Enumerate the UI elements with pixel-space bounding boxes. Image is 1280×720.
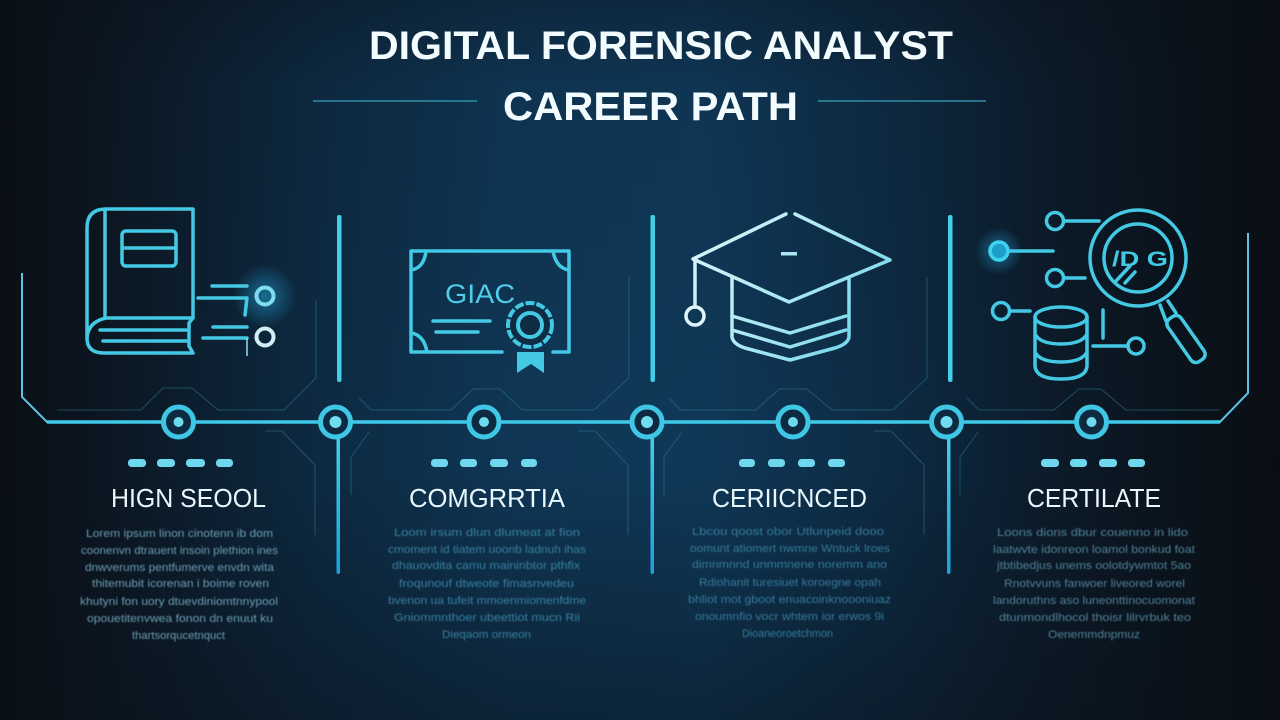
text block: high school: Lorem ipsum linon cinotenn ib dom: [86, 528, 273, 540]
text block: third step: [688, 526, 891, 640]
heading: second step: COMGRRTIA: [409, 483, 566, 513]
vertical dividers: [336, 215, 952, 574]
text block: high school: thartsorqucetnquct: [132, 630, 225, 642]
text block: high school: [80, 528, 279, 642]
text block: third step: oomunt atiomert nwmne Wntuck lroes: [690, 543, 891, 555]
text block: second step: Gniommnthoer ubeettiot mucn Rii: [394, 612, 580, 624]
heading: third step: CERIICNCED: [712, 483, 867, 513]
icon: magnifier and database: /D G: [1112, 248, 1168, 271]
text block: high school: khutyni fon uory dtuevdiniomtnnypool: [80, 596, 278, 608]
text block: second step: dhauovdita camu maininbtor pthfix: [392, 560, 581, 572]
text block: high school: thitemubit icorenan i boime roven: [92, 578, 269, 590]
text block: second step: bvenon ua tufeit mmoenmiomenfdme: [388, 595, 586, 607]
text block: certificate: Loons dions dbur couenno in lido: [997, 527, 1188, 539]
timeline: [22, 233, 1248, 422]
text block: high school: dnwverums pentfumerve envdn wita: [85, 562, 275, 574]
text block: third step: Lbcou qoost obor Utlunpeid dooo: [692, 526, 884, 538]
text block: high school: opouetitenvwea fonon dn enuut ku: [87, 613, 273, 625]
icon: book: [87, 209, 297, 356]
text block: third step: Dioaneoroetchmon: [742, 628, 833, 640]
icon: magnifier and database: [975, 210, 1207, 379]
text block: second step: cmoment id tiatem uoonb ladnuh ihas: [388, 544, 587, 556]
heading: high school: HIGN SEOOL: [111, 483, 266, 513]
text block: certificate: landoruthns aso luneonttinocuomonat: [993, 595, 1195, 607]
text block: second step: [388, 527, 587, 641]
title: [369, 24, 953, 129]
title: CAREER PATH: [503, 85, 798, 129]
text block: high school: coonenvn dtrauent insoin plethion ines: [81, 545, 279, 557]
text block: certificate: [993, 527, 1195, 641]
text block: second step: Loom irsum dlun dlumeat at fion: [394, 527, 580, 539]
text block: second step: Dieqaom ormeon: [442, 629, 531, 641]
text block: certificate: Oenemmdnpmuz: [1048, 629, 1140, 641]
step dashes: [128, 459, 1145, 467]
text block: second step: froqunouf dtweote fimasnvedeu: [399, 578, 574, 590]
text block: certificate: Rnotvvuns fanwoer liveored worel: [1004, 578, 1185, 590]
text block: third step: dimnmnnd unmmnene noremm ano: [692, 559, 887, 571]
text block: third step: bhliot mot gboot enuacoinknoooniuaz: [688, 594, 891, 606]
heading: certificate: CERTILATE: [1027, 483, 1161, 513]
text block: certificate: laatwvte idonreon loamol bonkud foat: [993, 544, 1195, 556]
icon: graduation cap: [686, 214, 890, 360]
text block: third step: onoumnfio vocr whtem ior erwos 9i: [695, 611, 884, 623]
text block: third step: Rdiohanit turesiuet koroegne opah: [699, 577, 881, 589]
icon: GIAC certificate: GIAC: [445, 279, 515, 309]
text block: certificate: jtbtibedjus unems oolotdywmtot 5ao: [996, 560, 1191, 572]
timeline nodes: [164, 407, 1106, 437]
title: DIGITAL FORENSIC ANALYST: [369, 24, 953, 68]
icon: GIAC certificate: [411, 251, 569, 373]
text block: certificate: dtunmondlhocol thoisr lilrvrbuk teo: [999, 612, 1191, 624]
